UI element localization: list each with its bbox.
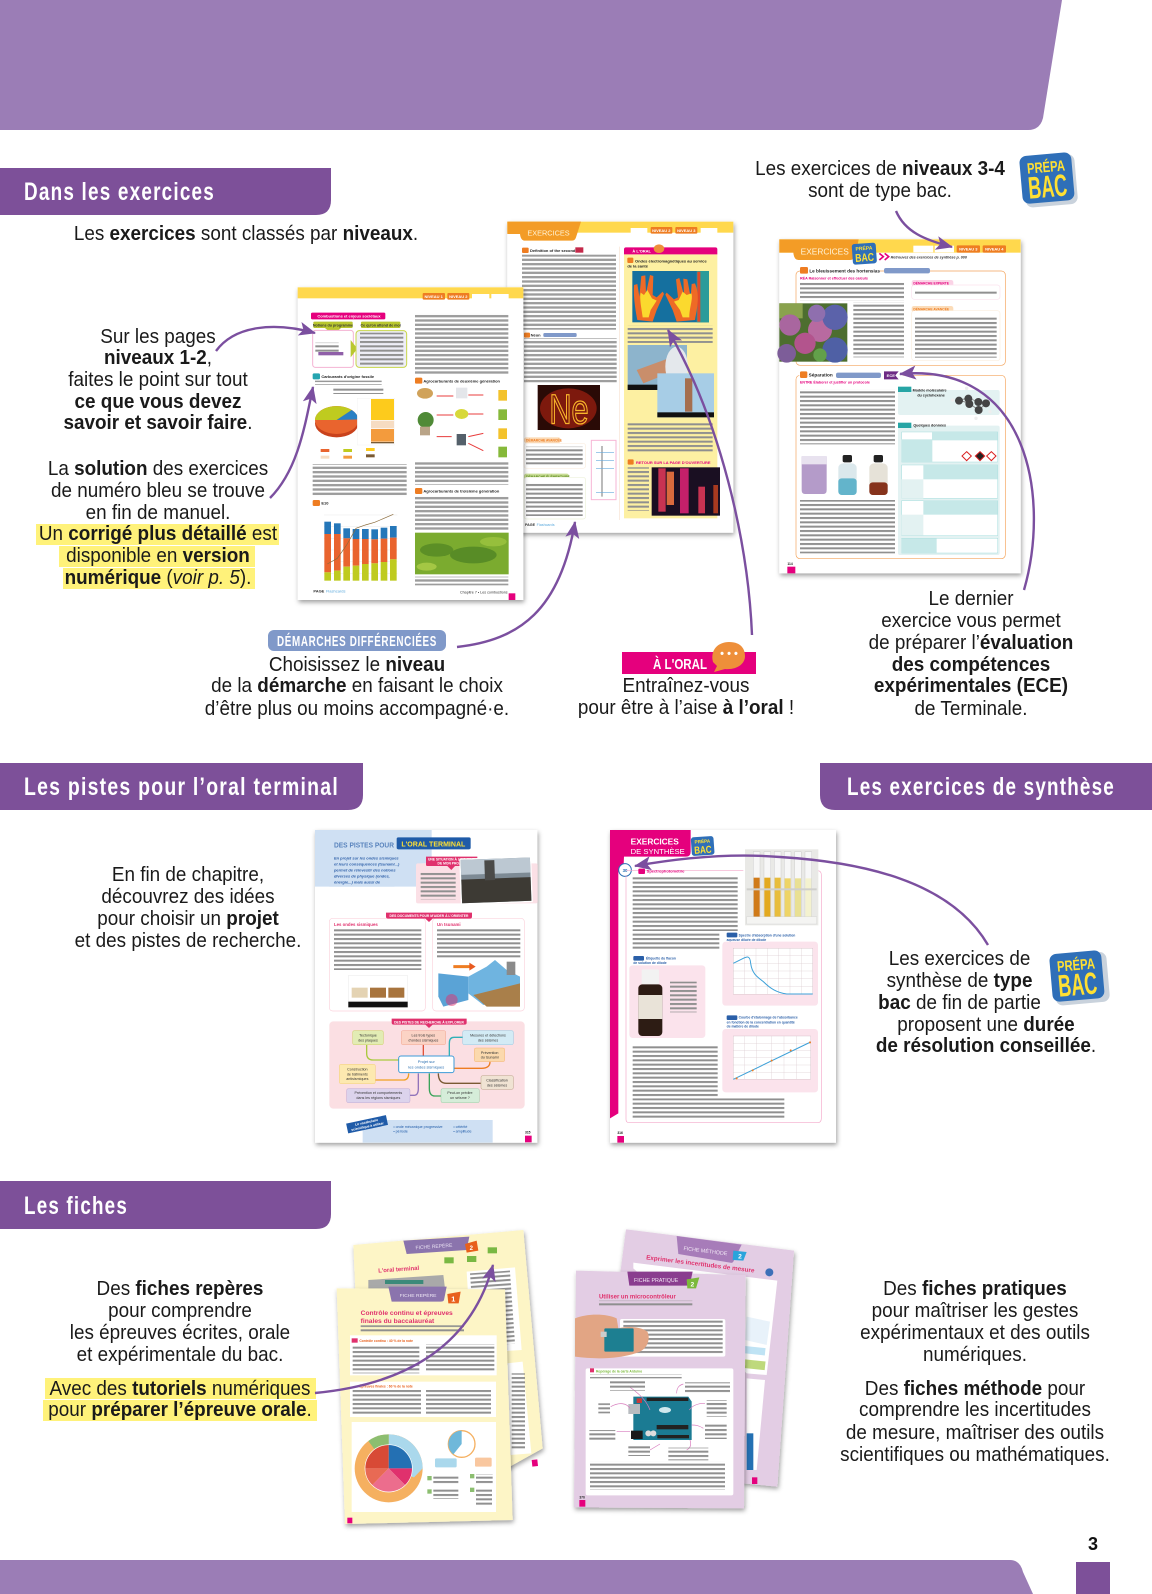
- page thumbnail: exercices niveaux 3-4: [777, 239, 1021, 573]
- page number: 3: [1088, 1534, 1098, 1554]
- text: fiches repères: les épreuves écrites, orale: [70, 1322, 290, 1344]
- page thumbnail: exercices de synthèse: Courbe d'étalonnage de l'absorbance: [739, 1016, 798, 1020]
- thumbnails: fiches pratique et méthode: FICHE MÉTHODE: [683, 1245, 728, 1257]
- page thumbnail: oral terminal: scientifique à utiliser: [351, 1121, 385, 1132]
- text: le dernier exercice: exercice vous permet: [881, 610, 1061, 632]
- panel: pistes de recherche mind map: des séismes: [478, 1039, 498, 1043]
- text: solution des exercices: La solution des exercices: [48, 458, 268, 480]
- text: sur les pages niveaux 1-2: ce que vous devez: [75, 391, 242, 413]
- page thumbnail: exercices niveaux 1-2: [298, 287, 523, 600]
- panel: à l'oral: [624, 244, 720, 518]
- panel: pistes de recherche mind map: de bâtiments: [347, 1072, 368, 1076]
- text: solution des exercices: version: [183, 545, 250, 567]
- text: sur les pages niveaux 1-2: savoir et savoir faire: [64, 412, 247, 434]
- photo: algae: [415, 533, 509, 574]
- thumbnails: fiches repères: Contrôle continu : 40 % de la note: [359, 1339, 413, 1343]
- chart: étalonnage: [722, 1029, 818, 1092]
- page thumbnail: exercices niveaux 2-3: DÉMARCHE AVANCÉE: [526, 437, 563, 442]
- thumbnails: fiches pratique et méthode: Exprimer les incertitudes de mesure: [646, 1254, 755, 1275]
- panel: combustions et enjeux sociétaux: [311, 313, 407, 367]
- page thumbnail: exercices niveaux 1-2: NIVEAU 2: [449, 294, 468, 299]
- text: fiches pratiques et méthode: expérimentaux et des outils: [860, 1322, 1090, 1344]
- page thumbnail: oral terminal: • amplitude: [453, 1129, 471, 1133]
- icon: prépa bac top: BAC: [1027, 167, 1069, 206]
- panel: séparation: Modèle moléculaire: [913, 388, 947, 392]
- photo: tubes: [745, 849, 818, 925]
- thumbnails: fiches pratique et méthode: Repérage de la carte Arduino: [596, 1369, 642, 1373]
- right column text: Agrocarburants de deuxième génération: [423, 378, 501, 383]
- heading: les exercices de synthèse: [820, 763, 1152, 810]
- text: fiches pratiques et méthode: numériques.: [923, 1344, 1027, 1366]
- panel: séparation: du cyclohexane: [917, 394, 945, 398]
- icon: prépa bac top: PRÉPA: [1026, 157, 1066, 178]
- text: fiches pratiques et méthode: comprendre les incertitudes: [859, 1399, 1091, 1421]
- text: entraînez-vous: Entraînez-vous: [623, 675, 749, 697]
- panel: documents: DES DOCUMENTS POUR M'AIDER À L'ORIENTER: [390, 913, 469, 918]
- text: exercices de synthèse: synthèse de: [887, 970, 994, 992]
- text: sur les pages niveaux 1-2: .: [247, 412, 252, 434]
- page thumbnail: oral terminal: diverses de physique (ondes,: [334, 873, 390, 878]
- neon photo: Ne: [549, 385, 589, 432]
- thumbnails: fiches repères: FICHE REPÈRE: [400, 1292, 437, 1299]
- page thumbnail: exercices de synthèse: PRÉPA: [694, 836, 711, 845]
- panel: pistes de recherche mind map: d'ondes sismiques: [408, 1039, 438, 1043]
- text: fiches pratiques et méthode: fiches méthode pour: [904, 1378, 1085, 1400]
- text: fiches pratiques et méthode: de mesure, maîtriser des outils: [846, 1422, 1104, 1444]
- page thumbnail: exercices de synthèse: de matière de diiode: [727, 1025, 759, 1029]
- text: tutoriels numériques: préparer l’épreuve orale.: [91, 1399, 312, 1421]
- chart: small pie: [448, 1431, 475, 1457]
- text: le dernier exercice: expérimentales (ECE): [874, 675, 1068, 697]
- panel: hortensias: DÉMARCHE EXPERTE: [913, 281, 950, 286]
- panel: hortensias: DÉMARCHE AVANCÉE: [913, 307, 950, 312]
- panel: à l'oral: de la santé: [627, 264, 649, 269]
- text: exercices de synthèse: de fin de partie: [911, 992, 1041, 1014]
- panel: documents: Un tsunami: [437, 922, 461, 927]
- page thumbnail: exercices niveaux 1-2: PAGE: [313, 588, 325, 593]
- page thumbnail: exercices niveaux 3-4: PRÉPA: [855, 243, 873, 253]
- panel: séparation: ENTRE Élaborer et justifier un protocole: [800, 380, 870, 385]
- page thumbnail: oral terminal: 315: [525, 1130, 531, 1134]
- top banner: [0, 0, 1062, 130]
- text: solution des exercices: numérique: [65, 567, 161, 589]
- text: exercices de synthèse: proposent une: [897, 1014, 1023, 1036]
- panel: pistes de recherche mind map: Mesures et détections: [470, 1034, 506, 1038]
- text: en fin de chapitre: En fin de chapitre,: [112, 864, 264, 886]
- page thumbnail: oral terminal: Le vocabulaire: [355, 1118, 379, 1127]
- panel: combustions et enjeux sociétaux: Ce qu'on attend de moi: [361, 323, 401, 327]
- panel: combustions et enjeux sociétaux: Notions du programme: [313, 323, 353, 327]
- panel: hortensias: RÉA Raisonner et effectuer des calculs: [800, 275, 868, 280]
- page thumbnail: oral terminal: [315, 830, 538, 1143]
- panel: pistes de recherche mind map: Peut-on prédire: [447, 1091, 473, 1095]
- page thumbnail: exercices niveaux 2-3: PAGE: [525, 523, 536, 527]
- thumbnails: fiches pratique et méthode: FICHE PRATIQUE: [634, 1278, 679, 1284]
- page thumbnail: exercices niveaux 2-3: EXERCICES: [527, 229, 570, 238]
- page thumbnail: exercices niveaux 2-3: NIVEAU 2: [652, 228, 671, 233]
- thumbnails: fiches repères: L'oral terminal: [378, 1266, 420, 1275]
- icon: prépa bac synthèse: [1049, 949, 1110, 1006]
- page thumbnail: oral terminal: énergie...) mais aussi de: [334, 879, 381, 884]
- text: en fin de chapitre: pour choisir un: [97, 908, 226, 930]
- panel: à l'oral: Ondes électromagnétiques au service: [635, 258, 708, 263]
- page thumbnail: exercices niveaux 2-3: Definition of the second: [530, 248, 576, 253]
- panel: pistes de recherche mind map: du tsunami: [481, 1056, 499, 1060]
- text: solution des exercices: disponible en: [66, 545, 183, 567]
- text: exercices de synthèse: bac: [878, 992, 911, 1014]
- page thumbnail: oral terminal: • célérité: [453, 1125, 467, 1129]
- text: solution des exercices: Un: [39, 523, 68, 545]
- page thumbnail: oral terminal: et leurs conséquences (tsunami...): [334, 861, 400, 866]
- page thumbnail: exercices de synthèse: en fonction de la concentration en quantité: [727, 1020, 795, 1024]
- text: exercices de synthèse: de résolution conseillée: [876, 1035, 1091, 1057]
- page thumbnail: exercices de synthèse: 316: [617, 1131, 623, 1135]
- badge: à l'oral: À L'ORAL: [653, 656, 707, 673]
- highlight: corrigé: [36, 524, 279, 589]
- text: exercices de synthèse: durée: [1023, 1014, 1075, 1036]
- heading: Dans les exercices: Dans les exercices: [24, 178, 215, 206]
- panel: situation: [416, 856, 538, 905]
- panel: à l'oral: À L'ORAL: [632, 248, 652, 253]
- panel: pistes de recherche mind map: des séismes: [487, 1083, 507, 1087]
- thumbnails: fiches repères: Épreuves finales : 60 % de la note: [359, 1384, 413, 1389]
- page thumbnail: exercices niveaux 1-2: E10: [321, 501, 329, 506]
- photo: hand with board: [575, 1315, 649, 1358]
- panel: pistes de recherche mind map: antisismiques: [346, 1077, 369, 1081]
- page thumbnail: oral terminal: En projet sur les ondes sismiques: [334, 855, 399, 860]
- page thumbnail: exercices niveaux 3-4: Retrouvez des exercices de synthèse p. 000: [891, 255, 967, 259]
- page thumbnail: exercices niveaux 1-2: NIVEAU 1: [424, 294, 444, 299]
- panel: à l'oral: RETOUR SUR LA PAGE D'OUVERTURE: [636, 460, 711, 465]
- panel: combustions et enjeux sociétaux: Combustions et enjeux sociétaux: [317, 314, 381, 319]
- thumbnails: fiches pratique et méthode: 2: [738, 1253, 742, 1260]
- panel: séparation: ECE: [887, 373, 895, 378]
- page tab: [1076, 1562, 1110, 1594]
- panel: pistes de recherche mind map: [329, 1019, 525, 1109]
- icon: prépa bac top: [1019, 152, 1078, 208]
- panel: flacon: [629, 965, 705, 1038]
- page thumbnail: exercices niveaux 3-4: EXERCICES: [801, 246, 849, 256]
- page thumbnail: oral terminal: permet de réinvestir des notions: [333, 867, 396, 872]
- thumbnails: fiches repères: finales du baccalauréat: [361, 1318, 435, 1325]
- text: tutoriels numériques: Avec des tutoriels numériques: [50, 1378, 310, 1400]
- panel: pistes de recherche mind map: Projet sur: [418, 1059, 436, 1064]
- heading: les pistes pour l'oral terminal: [0, 763, 363, 810]
- badge: démarches différenciées: [268, 630, 446, 651]
- panel: pistes de recherche mind map: des plaques: [358, 1039, 378, 1043]
- thumbnails: fiches repères: FICHE REPÈRE: [415, 1242, 453, 1251]
- panel: pistes de recherche mind map: Prévention et comportements: [354, 1091, 402, 1095]
- page thumbnail: exercices de synthèse: Spectre d'absorption d'une solution: [739, 933, 795, 937]
- panel: pistes de recherche mind map: Prévention: [481, 1051, 498, 1055]
- page thumbnail: exercices niveaux 1-2: Flashcards: [326, 588, 345, 593]
- page thumbnail: exercices niveaux 2-3: DÉMARCHE ÉLÉMENTAIRE: [526, 474, 571, 479]
- text: fiches repères: Des fiches repères: [97, 1278, 263, 1300]
- heading: les fiches: Les fiches: [24, 1192, 128, 1220]
- right column text: [415, 313, 508, 384]
- chart: spectre: [722, 942, 818, 1006]
- panel: pistes de recherche mind map: DES PISTES DE RECHERCHE À EXPLORER: [394, 1019, 464, 1024]
- badge: à l'oral: • • •: [720, 648, 738, 660]
- page thumbnail: exercices niveaux 1-2: Agrocarburants de troisième génération: [423, 489, 500, 494]
- page thumbnail: exercices niveaux 2-3: Néon: [531, 332, 541, 337]
- text: fiches pratiques et méthode: scientifiques ou mathématiques.: [840, 1444, 1110, 1466]
- text: en fin de chapitre: et des pistes de recherche.: [75, 930, 301, 952]
- page thumbnail: exercices de synthèse: [610, 830, 836, 1143]
- panel: séparation: Séparation: [809, 373, 833, 378]
- panel: situation: DE MON PROJET: [438, 862, 465, 866]
- text: fiches pratiques et méthode: Des: [865, 1378, 904, 1400]
- text: entraînez-vous: à l’oral !: [723, 697, 794, 719]
- page thumbnail: exercices niveaux 2-3: [507, 222, 733, 533]
- text: solution des exercices: (voir p. 5).: [166, 567, 251, 589]
- text: en fin de chapitre: découvrez des idées: [101, 886, 275, 908]
- page thumbnail: exercices de synthèse: de solution de diiode: [633, 961, 667, 965]
- chart: E10 stacked bars: [324, 514, 397, 581]
- thumbnails: fiches repères: 1: [451, 1295, 455, 1304]
- page thumbnail: exercices de synthèse: BAC: [694, 845, 712, 857]
- badge: à l'oral: [622, 642, 756, 674]
- thumbnails: fiches pratique et méthode: Utiliser un microcontrôleur: [599, 1294, 676, 1300]
- chart: pie: [315, 406, 358, 437]
- page thumbnail: exercices de synthèse: aqueuse diluée de diiode: [727, 938, 766, 942]
- text: choisissez le niveau: démarche en faisant le choix: [257, 675, 503, 697]
- text: exercices de niveaux 3-4: sont de type bac.: [808, 180, 952, 202]
- badge: démarches différenciées: DÉMARCHES DIFFÉRENCIÉES: [277, 633, 437, 650]
- text: fiches repères: et expérimentale du bac.: [77, 1344, 283, 1366]
- illustration: arduino board: [611, 1384, 705, 1450]
- footer band: [0, 1560, 1033, 1594]
- panel: documents: Les ondes sismiques: [334, 922, 378, 927]
- thumbnails: fiches repères: Contrôle continu et épreuves: [361, 1310, 453, 1317]
- page thumbnail: oral terminal: DES PISTES POUR: [334, 840, 394, 849]
- text: en fin de chapitre: projet: [226, 908, 279, 930]
- panel: hortensias: Le bleuissement des hortensias: [809, 268, 880, 273]
- photo: hydrangeas: [777, 303, 848, 363]
- text: exercices de synthèse: .: [1091, 1035, 1096, 1057]
- panel: séparation: Quelques données: [913, 424, 946, 428]
- icon: prépa bac synthèse: BAC: [1057, 965, 1099, 1004]
- arrows: [216, 211, 1034, 1393]
- text: fiches pratiques et méthode: Des fiches pratiques: [883, 1278, 1067, 1300]
- text: exercices de niveaux 3-4: Les exercices de niveaux 3-4: [755, 158, 1005, 180]
- text: le dernier exercice: Le dernier: [928, 588, 1014, 610]
- page thumbnail: oral terminal: • période: [393, 1129, 408, 1133]
- diagram: energy levels: [591, 440, 616, 500]
- text: fiches repères: pour comprendre: [108, 1300, 252, 1322]
- page thumbnail: exercices de synthèse: DE SYNTHÈSE: [631, 847, 685, 856]
- text: sur les pages niveaux 1-2: niveaux 1-2: [104, 347, 207, 369]
- text: entraînez-vous: pour être à l’aise: [578, 697, 723, 719]
- thumbnails: fiches repères: [337, 1230, 543, 1524]
- panel: pistes de recherche mind map: Les trois types: [412, 1034, 435, 1038]
- text: le dernier exercice: évaluation: [980, 632, 1073, 654]
- thumbnails: fiches repères: 2: [470, 1246, 474, 1252]
- thumbnails: fiches pratique et méthode: 370: [579, 1495, 585, 1499]
- icon: prépa bac synthèse: PRÉPA: [1056, 955, 1096, 976]
- panel: pistes de recherche mind map: Tectonique: [359, 1034, 377, 1038]
- page thumbnail: oral terminal: L'ORAL TERMINAL: [401, 840, 466, 849]
- text: solution des exercices: corrigé plus détaillé est: [68, 523, 277, 545]
- text: tutoriels numériques: pour: [48, 1399, 91, 1421]
- panel: documents: [329, 913, 524, 1011]
- chart: coefficients donut: [355, 1434, 423, 1502]
- page thumbnail: exercices de synthèse: 30: [623, 868, 628, 873]
- page thumbnail: exercices niveaux 2-3: NIVEAU 3: [677, 228, 696, 233]
- text: choisissez le niveau: Choisissez le niveau: [269, 654, 445, 676]
- page thumbnail: exercices niveaux 3-4: 114: [787, 562, 793, 566]
- text: solution des exercices: en fin de manuel.: [86, 502, 230, 524]
- chart: stacked column: [357, 398, 395, 445]
- text: exercices de synthèse: type: [994, 970, 1033, 992]
- page thumbnail: exercices niveaux 3-4: NIVEAU 3: [959, 247, 978, 252]
- heading: les fiches: [0, 1181, 331, 1229]
- page thumbnail: exercices de synthèse: Spectrophotométrie: [647, 869, 685, 874]
- panel: pistes de recherche mind map: Construction: [347, 1068, 368, 1072]
- text: sur les pages niveaux 1-2: ,: [207, 347, 212, 369]
- text: sur les pages niveaux 1-2: Sur les pages: [100, 326, 216, 348]
- highlight: tutoriels: [43, 1378, 317, 1421]
- text: choisissez le niveau: de la: [211, 675, 257, 697]
- page thumbnail: exercices de synthèse: Étiquette du flacon: [646, 955, 676, 960]
- panel: pistes de recherche mind map: les ondes sismiques: [408, 1065, 444, 1070]
- text: solution des exercices: de numéro bleu se trouve: [51, 480, 265, 502]
- text: choisissez le niveau: d’être plus ou moins accompagné·e.: [205, 698, 509, 720]
- page thumbnail: exercices niveaux 1-2: Chapitre 7 • Les combustions: [460, 590, 508, 594]
- panel: pistes de recherche mind map: Classification: [486, 1079, 508, 1083]
- panel: séparation: [796, 371, 1005, 559]
- intro text: niveaux: Les exercices sont classés par niveaux.: [74, 223, 418, 245]
- text: fiches pratiques et méthode: pour maîtriser les gestes: [872, 1300, 1079, 1322]
- text: exercices de synthèse: Les exercices de: [889, 948, 1030, 970]
- page thumbnail: exercices de synthèse: EXERCICES: [631, 836, 679, 846]
- thumbnails: fiches pratique et méthode: [574, 1229, 794, 1508]
- diagram: agrocarburants: [417, 388, 507, 457]
- panel: hortensias: [796, 266, 1005, 365]
- panel: pistes de recherche mind map: dans les régions sismiques: [356, 1096, 400, 1100]
- page thumbnail: exercices niveaux 3-4: BAC: [855, 252, 874, 265]
- heading: les pistes pour l'oral terminal: Les pistes pour l’oral terminal: [24, 773, 339, 801]
- page thumbnail: exercices niveaux 2-3: Flashcards: [537, 523, 555, 527]
- panel: situation: UNE SITUATION À L'ORIGINE: [428, 857, 475, 862]
- text: sur les pages niveaux 1-2: faites le point sur tout: [68, 369, 248, 391]
- text: le dernier exercice: de préparer l’: [869, 632, 980, 654]
- page thumbnail: oral terminal: • onde mécanique progressive: [393, 1125, 443, 1129]
- heading: Dans les exercices: [0, 168, 331, 215]
- page thumbnail: exercices niveaux 1-2: Carburants d'origine fossile: [321, 374, 375, 379]
- text: le dernier exercice: des compétences: [892, 654, 1050, 676]
- page thumbnail: exercices niveaux 3-4: NIVEAU 4: [985, 247, 1004, 252]
- text: le dernier exercice: de Terminale.: [914, 698, 1028, 720]
- panel: pistes de recherche mind map: un séisme ?: [450, 1096, 470, 1100]
- thumbnails: fiches pratique et méthode: 2: [690, 1282, 694, 1289]
